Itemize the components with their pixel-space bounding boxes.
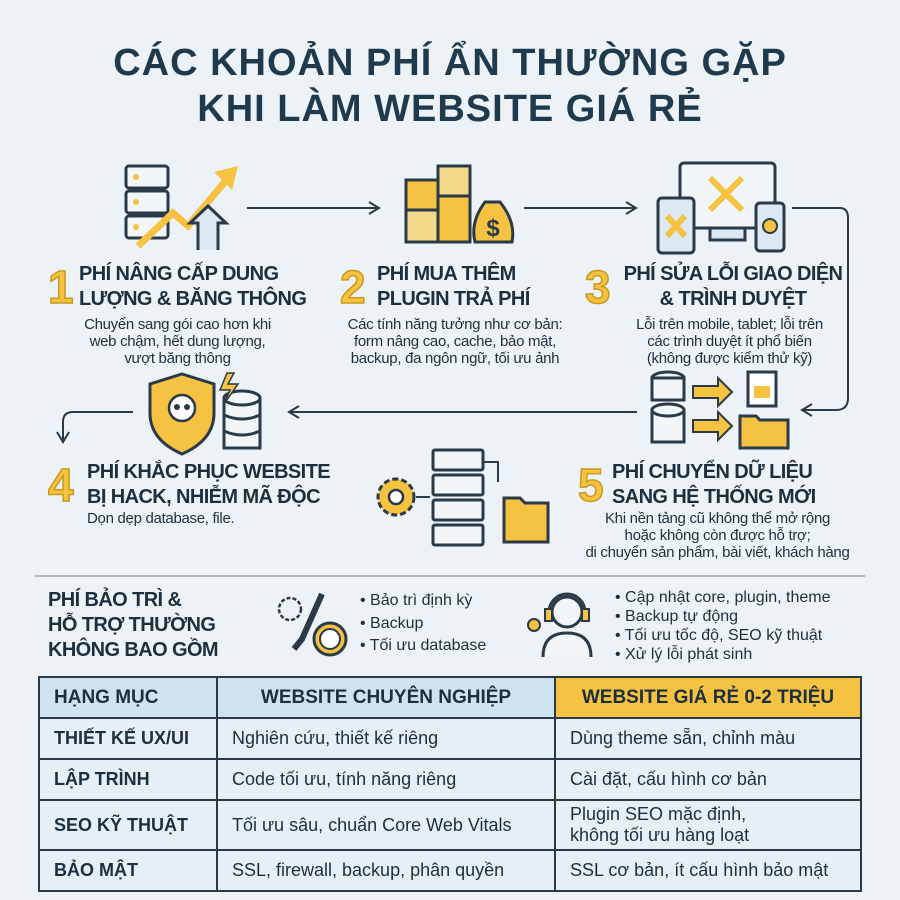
comparison table (38, 676, 862, 892)
icon: puzzle and money bag: $ (486, 215, 500, 242)
icon: shield with skull and database (148, 372, 262, 456)
description 2: form nâng cao, cache, bảo mật, (354, 333, 556, 350)
title: KHI LÀM WEBSITE GIÁ RẺ (197, 88, 703, 130)
icon: headset support (527, 592, 592, 657)
step 2 (340, 261, 562, 367)
description 1: web chậm, hết dung lượng, (90, 333, 265, 350)
heading 4 (87, 460, 330, 508)
icon: data transfer (650, 370, 790, 450)
heading 3 (624, 262, 842, 310)
description 5: hoặc không còn được hỗ trợ; (625, 527, 810, 544)
icon: wrench gear stopwatch (278, 592, 348, 656)
description 4: Dọn dẹp database, file. (87, 510, 234, 527)
number 5: 5 (578, 459, 604, 511)
comparison table: SSL cơ bản, ít cấu hình bảo mật (570, 860, 828, 880)
step 3 (585, 261, 842, 367)
heading 5: SANG HỆ THỐNG MỚI (612, 486, 816, 508)
icon: puzzle and money bag (404, 164, 514, 244)
comparison table: Dùng theme sẵn, chỉnh màu (570, 728, 795, 748)
bullets right: • Cập nhật core, plugin, theme (615, 589, 831, 606)
maintenance section (48, 588, 831, 663)
description 3: (không được kiểm thử kỹ) (647, 350, 812, 367)
description 3: Lỗi trên mobile, tablet; lỗi trên (636, 316, 823, 333)
comparison table: SSL, firewall, backup, phân quyền (232, 860, 504, 880)
bullets left: • Bảo trì định kỳ (360, 592, 472, 609)
arrow 1 to 2 (247, 201, 381, 215)
heading 3: & TRÌNH DUYỆT (660, 288, 806, 310)
heading 1 (79, 262, 306, 310)
description 5: di chuyển sản phẩm, bài viết, khách hàng (585, 544, 850, 561)
comparison table: Code tối ưu, tính năng riêng (232, 769, 456, 789)
maintenance heading: HỖ TRỢ THƯỜNG (48, 614, 215, 636)
description 5: Khi nền tảng cũ không thể mở rộng (605, 510, 830, 527)
description 3 (636, 316, 823, 367)
heading 2 (377, 262, 531, 310)
description 2: backup, đa ngôn ngữ, tối ưu ảnh (351, 350, 559, 367)
comparison table: THIẾT KẾ UX/UI (54, 728, 189, 748)
description 3: các trình duyệt ít phổ biến (647, 333, 812, 350)
heading 2: PLUGIN TRẢ PHÍ (377, 288, 530, 310)
comparison table: BẢO MẬT (54, 860, 138, 880)
bullets left: • Tối ưu database (360, 637, 486, 654)
comparison table: không tối ưu hàng loạt (570, 825, 749, 845)
title (113, 40, 787, 130)
maintenance heading: KHÔNG BAO GỒM (48, 639, 218, 661)
bullets right: • Backup tự động (615, 608, 738, 625)
heading 1: PHÍ NÂNG CẤP DUNG (79, 263, 278, 285)
comparison table: Nghiên cứu, thiết kế riêng (232, 728, 438, 748)
comparison table: SEO KỸ THUẬT (54, 814, 188, 834)
title: CÁC KHOẢN PHÍ ẨN THƯỜNG GẶP (113, 42, 787, 84)
heading 5: PHÍ CHUYỂN DỮ LIỆU (612, 461, 812, 483)
arrow 5 to 4 (287, 405, 637, 419)
comparison table: Cài đặt, cấu hình cơ bản (570, 769, 767, 789)
heading 5 (612, 460, 816, 508)
comparison table: WEBSITE GIÁ RẺ 0-2 TRIỆU (582, 686, 834, 708)
maintenance heading (48, 588, 218, 661)
comparison table: Tối ưu sâu, chuẩn Core Web Vitals (232, 814, 512, 834)
comparison table: WEBSITE CHUYÊN NGHIỆP (261, 686, 511, 708)
heading 4: BỊ HACK, NHIỄM MÃ ĐỘC (87, 486, 320, 508)
bullets right (615, 589, 831, 663)
icon: gear server folder (376, 448, 550, 546)
description 2: Các tính năng tưởng như cơ bản: (348, 316, 562, 333)
step 4 (48, 459, 330, 527)
step 5 (578, 459, 850, 561)
description 5 (585, 510, 850, 561)
arrow 4 down-left (56, 411, 133, 444)
maintenance heading: PHÍ BẢO TRÌ & (48, 589, 181, 611)
description 2 (348, 316, 562, 367)
bullets left: • Backup (360, 614, 423, 632)
arrow 2 to 3 (524, 201, 638, 215)
bullets left (360, 592, 486, 654)
icon: server with growth arrow (124, 164, 238, 250)
number 3: 3 (585, 261, 611, 313)
bullets right: • Tối ưu tốc độ, SEO kỹ thuật (615, 627, 822, 644)
comparison table: HẠNG MỤC (54, 686, 158, 708)
heading 2: PHÍ MUA THÊM (377, 263, 516, 285)
arrow 3 to 5 (right loop) (792, 207, 849, 417)
heading 1: LƯỢNG & BĂNG THÔNG (79, 288, 306, 310)
comparison table: LẬP TRÌNH (54, 769, 150, 789)
step 1 (48, 261, 306, 367)
number 2: 2 (340, 261, 366, 313)
number 1: 1 (48, 261, 74, 313)
heading 3: PHÍ SỬA LỖI GIAO DIỆN (624, 263, 842, 285)
description 1 (84, 316, 271, 367)
number 4: 4 (48, 459, 74, 511)
icon: devices with tools (656, 162, 786, 254)
comparison table: Plugin SEO mặc định, (570, 804, 746, 824)
description 1: Chuyển sang gói cao hơn khi (84, 316, 271, 333)
heading 4: PHÍ KHẮC PHỤC WEBSITE (87, 461, 330, 483)
description 1: vượt băng thông (124, 350, 231, 367)
bullets right: • Xử lý lỗi phát sinh (615, 646, 752, 663)
